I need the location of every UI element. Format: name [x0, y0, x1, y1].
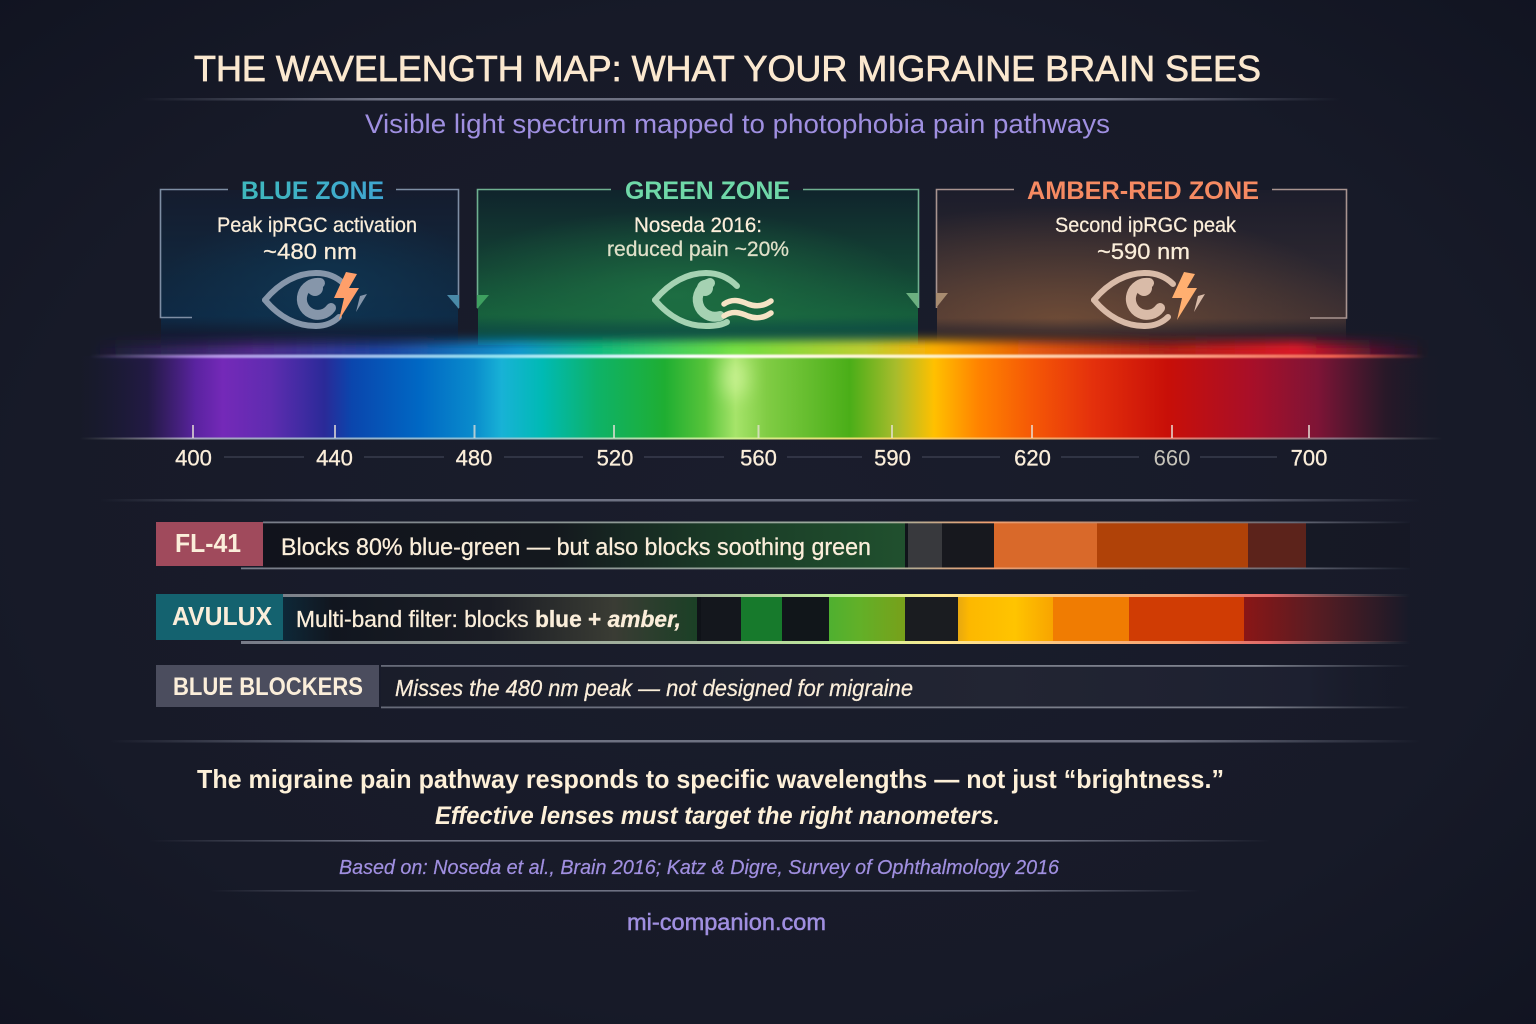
text: amber-red zone description: ~590 nm — [1097, 239, 1190, 264]
text: Avulux description: Multi-band filter: blocks blue + amber, — [296, 606, 681, 632]
text: blue zone description: ~480 nm — [263, 239, 357, 264]
spectrum axis ticks and wavelength labels: 400 — [175, 446, 212, 470]
spectrum axis ticks and wavelength labels — [175, 425, 1327, 470]
text: FL-41 description: Blocks 80% blue-green — but also blocks soothing green — [281, 534, 871, 561]
spectrum axis ticks and wavelength labels: 620 — [1014, 446, 1051, 470]
icon: eye with lightning bolt — [1094, 272, 1205, 326]
row: Avulux lens filter — [156, 594, 1413, 644]
subtitle: Visible light spectrum mapped to photophobia pain pathways — [365, 109, 1110, 139]
spectrum axis ticks and wavelength labels: 590 — [874, 446, 911, 470]
icon: eye with soothing waves — [655, 273, 771, 326]
heading: green zone: GREEN ZONE — [625, 177, 790, 205]
row: blue blockers — [156, 665, 1410, 708]
label: Avulux: AVULUX — [172, 601, 273, 631]
text: blue zone description: Peak ipRGC activation — [217, 214, 417, 237]
spectrum axis ticks and wavelength labels: 480 — [456, 446, 492, 470]
text: green zone description — [607, 214, 789, 261]
panel: blue zone — [160, 177, 459, 345]
spectrum axis ticks and wavelength labels: 520 — [597, 446, 633, 470]
spectrum axis ticks and wavelength labels: 700 — [1291, 446, 1327, 470]
label: Avulux — [156, 594, 283, 640]
spectrum axis ticks and wavelength labels: 660 — [1154, 446, 1190, 470]
takeaway text: The migraine pain pathway responds to specific wavelengths — not just “brightness.” — [197, 764, 1224, 794]
label: FL-41: FL-41 — [175, 528, 241, 558]
heading: blue zone: BLUE ZONE — [241, 177, 384, 205]
label: FL-41 — [156, 522, 263, 566]
icon: eye with lightning bolt — [265, 272, 367, 326]
takeaway text: Effective lenses must target the right nanometers. — [435, 802, 1000, 830]
text: amber-red zone description: Second ipRGC peak — [1055, 214, 1236, 237]
text: blue blockers description: Misses the 480 nm peak — not designed for migraine — [395, 675, 913, 701]
row: FL-41 lens filter — [156, 522, 1410, 569]
takeaway text — [197, 764, 1224, 830]
panel: green zone — [477, 177, 918, 345]
text: green zone description: reduced pain ~20% — [607, 238, 789, 261]
citation: Based on: Noseda et al., Brain 2016; Katz & Digre, Survey of Ophthalmology 2016 — [339, 857, 1060, 879]
label: blue blockers: BLUE BLOCKERS — [173, 673, 363, 701]
label: blue blockers — [156, 665, 379, 707]
title: THE WAVELENGTH MAP: WHAT YOUR MIGRAINE BRAIN SEES — [194, 48, 1261, 89]
text: amber-red zone description — [1055, 214, 1236, 264]
heading: amber-red zone: AMBER-RED ZONE — [1027, 177, 1259, 205]
website: mi-companion.com — [627, 909, 826, 935]
spectrum axis ticks and wavelength labels: 560 — [740, 446, 777, 470]
spectrum axis ticks and wavelength labels: 440 — [316, 446, 353, 470]
text: green zone description: Noseda 2016: — [634, 214, 762, 237]
text: blue zone description — [217, 214, 417, 264]
spectrum bar — [80, 340, 1442, 440]
panel: amber-red zone — [936, 177, 1346, 345]
